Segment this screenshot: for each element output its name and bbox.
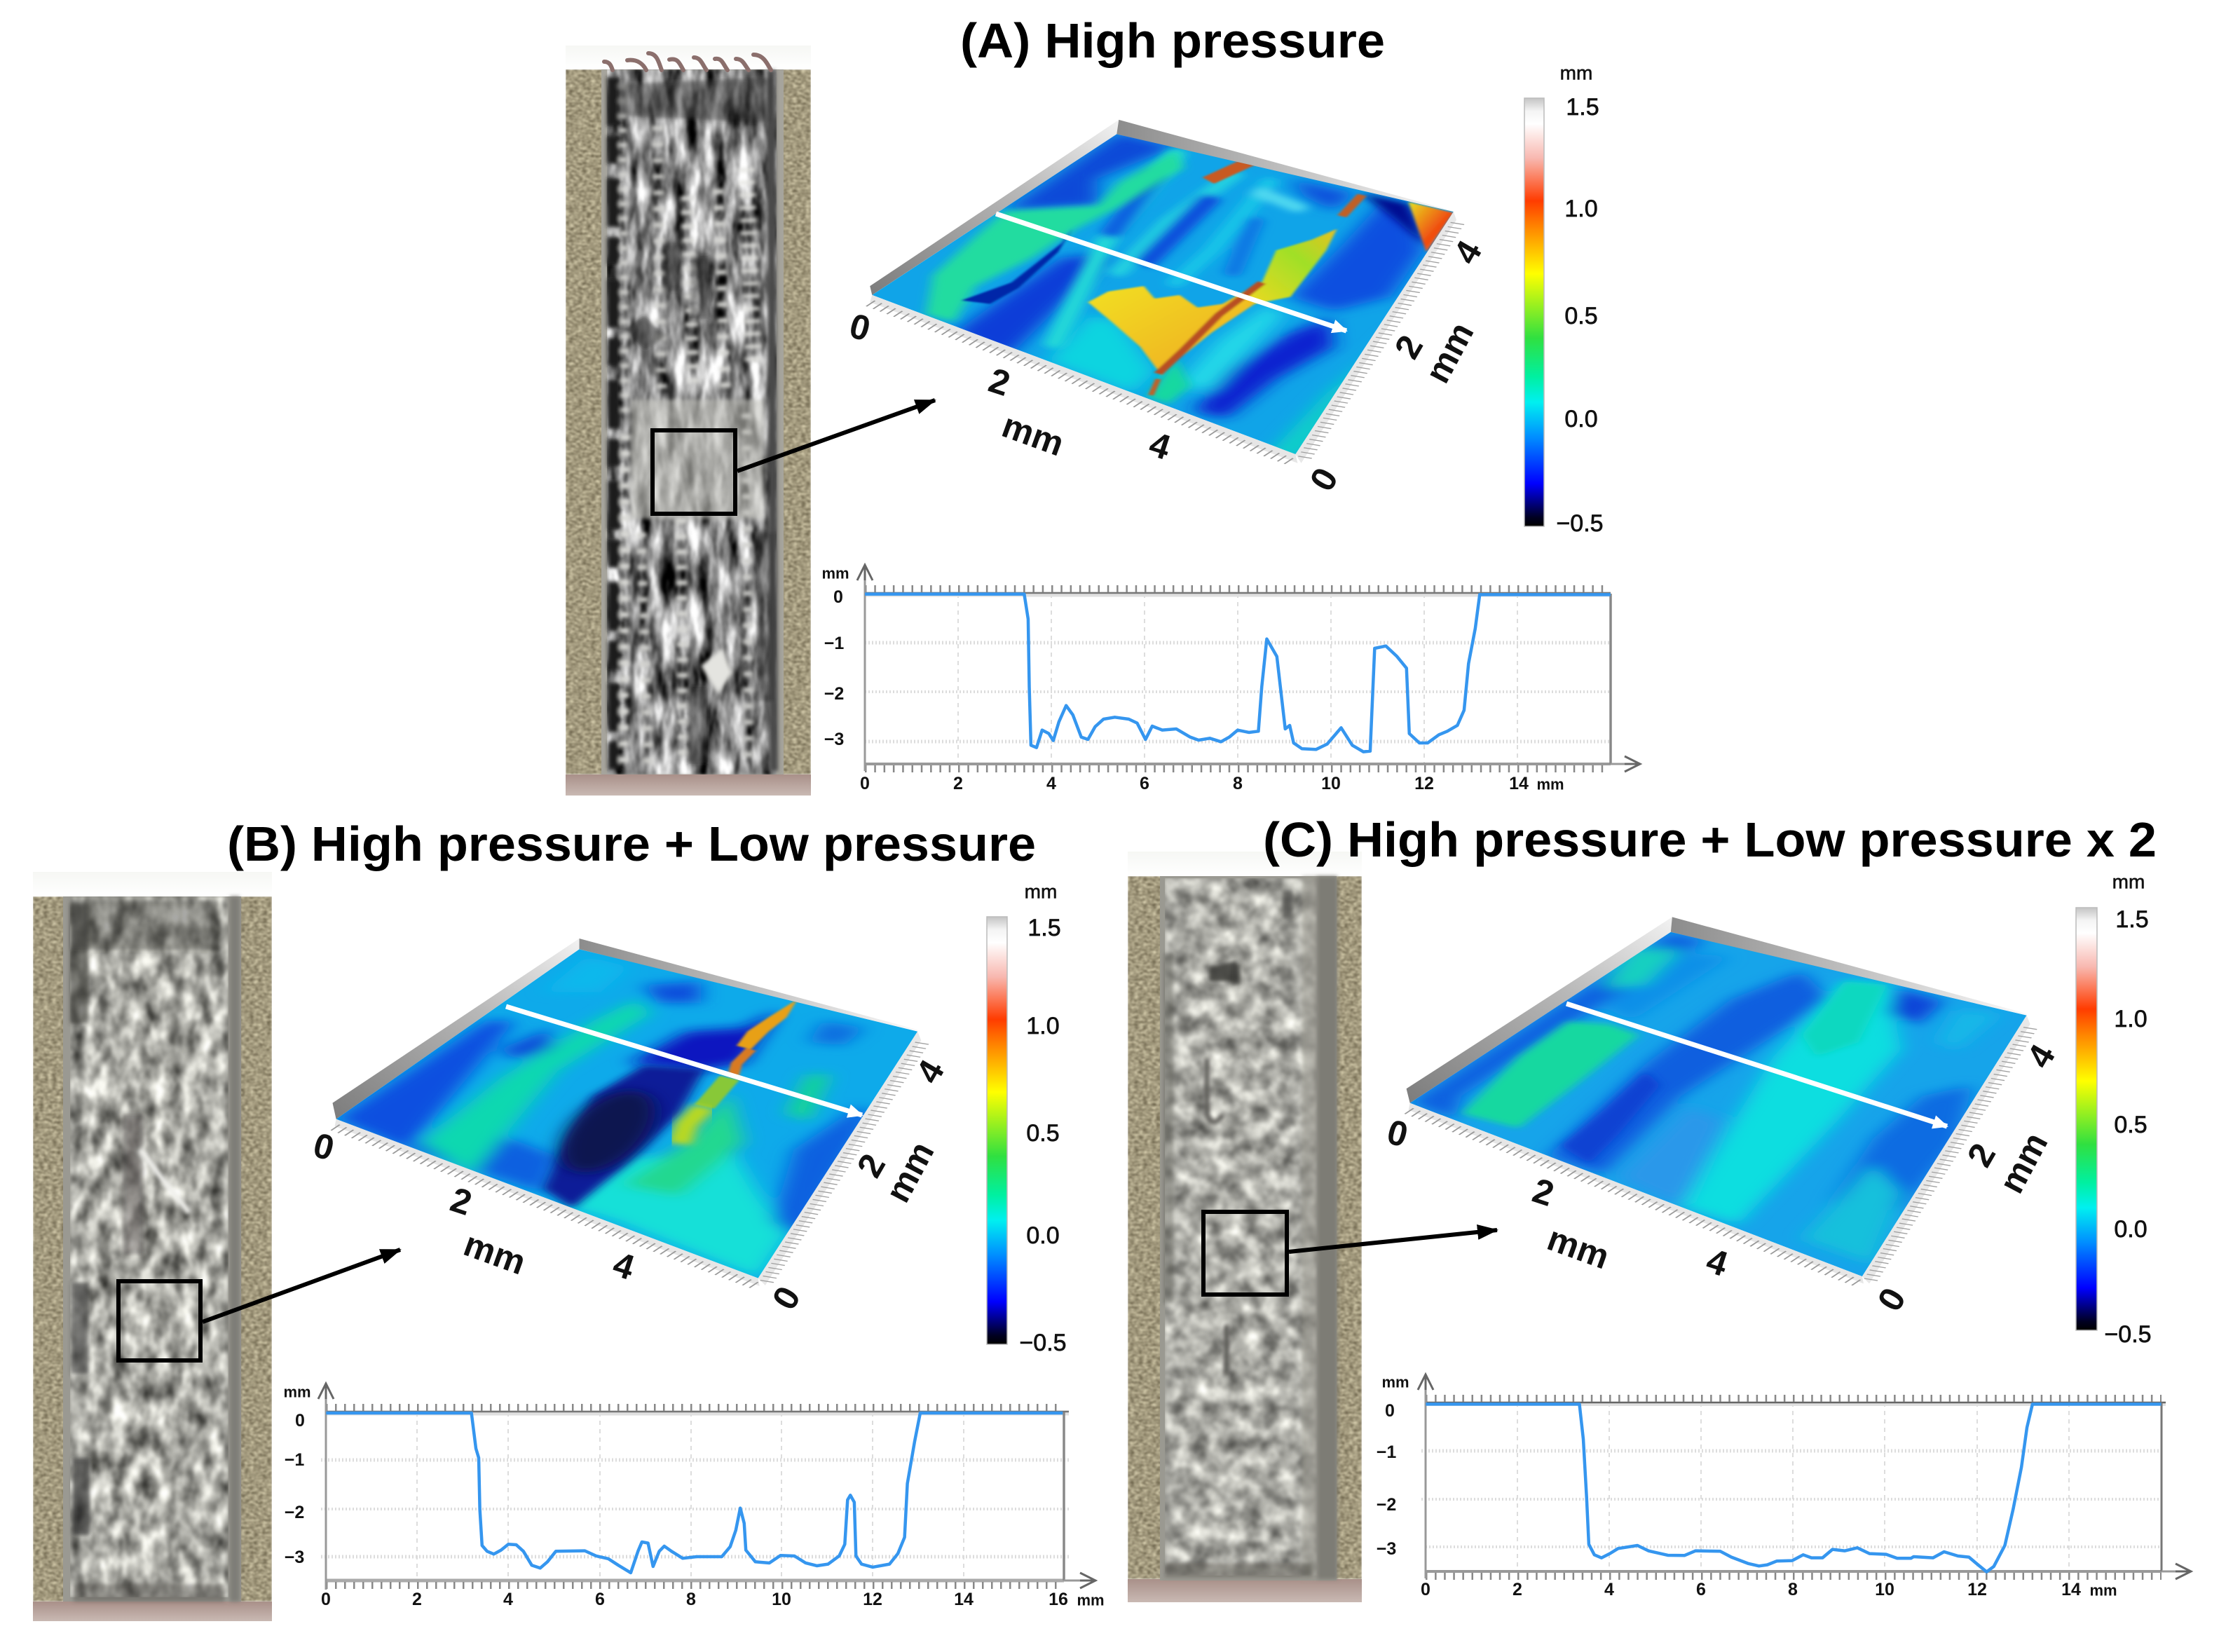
- profile chart A: 6: [1140, 774, 1149, 793]
- profile chart A: 0: [833, 587, 843, 607]
- profile chart A: 10: [1321, 774, 1341, 793]
- profile chart B: −3: [285, 1548, 304, 1567]
- profile chart B: 8: [686, 1590, 696, 1609]
- profile chart A: 14: [1509, 774, 1529, 793]
- profile chart C: −3: [1377, 1539, 1396, 1559]
- profile chart A: −1: [824, 634, 844, 653]
- profile chart B: mm: [1077, 1591, 1105, 1609]
- panel B: high pressure + low pressure: [33, 817, 1105, 1621]
- colour bar B: 0.5: [1026, 1120, 1060, 1147]
- axis labels A: 4: [1145, 424, 1175, 467]
- colour bar C: [2076, 871, 2152, 1348]
- axis labels A: mm: [1417, 316, 1482, 389]
- profile chart B: 16: [1049, 1590, 1068, 1609]
- axis labels C: 2: [1528, 1170, 1559, 1214]
- axis labels C: 4: [1702, 1241, 1733, 1284]
- profile chart C: 0: [1385, 1401, 1395, 1421]
- axis labels B: 0: [765, 1280, 808, 1316]
- colour bar A: [1524, 62, 1604, 537]
- colour bar B: −0.5: [1019, 1330, 1067, 1356]
- axis labels C: 0: [1870, 1281, 1913, 1318]
- profile chart C: 6: [1696, 1580, 1706, 1599]
- axis labels C: [1383, 1038, 2063, 1318]
- photo A: sample with braided surface: [566, 46, 811, 796]
- white profile arrow C: [1566, 1004, 1947, 1126]
- profile chart C: −2: [1377, 1495, 1396, 1515]
- colour bar C: −0.5: [2104, 1321, 2152, 1348]
- colour bar A: 0.0: [1564, 406, 1598, 432]
- profile chart B: 14: [954, 1590, 974, 1609]
- profile chart B: [283, 1384, 1105, 1609]
- colour bar B: [987, 880, 1067, 1356]
- colour bar C: 1.5: [2115, 906, 2149, 933]
- colour bar A: mm: [1560, 62, 1592, 84]
- axis labels B: 2: [849, 1147, 893, 1184]
- axis labels B: mm: [459, 1224, 531, 1283]
- colour bar C: 0.5: [2114, 1112, 2147, 1138]
- white profile arrow A: [996, 214, 1346, 331]
- colour bar C: 1.0: [2114, 1006, 2147, 1032]
- axis labels A: 0: [845, 306, 875, 349]
- profile chart B: 2: [412, 1590, 422, 1609]
- axis labels C: 4: [2019, 1038, 2063, 1074]
- colour bar B: mm: [1025, 880, 1057, 903]
- profile chart C: mm: [1381, 1374, 1409, 1391]
- profile chart A: 8: [1233, 774, 1243, 793]
- axis labels A: 2: [1387, 329, 1430, 365]
- profile chart C: −1: [1377, 1442, 1396, 1462]
- profile chart A: mm: [821, 565, 849, 582]
- arrow C: inset to 3D map: [1289, 1230, 1497, 1252]
- 3D surface map C: [1407, 917, 2032, 1284]
- axis labels C: mm: [1991, 1126, 2056, 1199]
- profile chart C: 8: [1788, 1580, 1798, 1599]
- arrow A: inset to 3D map: [737, 400, 935, 471]
- profile chart C: [1377, 1374, 2191, 1599]
- axis labels A: 0: [1302, 461, 1346, 498]
- profile chart B: −1: [285, 1450, 304, 1470]
- axis labels B: 0: [309, 1125, 339, 1168]
- axis labels B: 4: [608, 1244, 639, 1288]
- axis labels C: 2: [1960, 1137, 2003, 1173]
- inset box on photo A: [653, 430, 735, 514]
- inset box on photo B: [118, 1281, 200, 1360]
- title C: (C) High pressure + Low pressure x 2: [1263, 812, 2157, 867]
- profile chart C: 2: [1512, 1580, 1522, 1599]
- axis labels A: 2: [984, 360, 1015, 404]
- axis labels C: mm: [1543, 1218, 1614, 1277]
- profile chart B: −2: [285, 1503, 304, 1522]
- colour bar A: 1.5: [1566, 94, 1599, 121]
- profile chart B: 4: [503, 1590, 513, 1609]
- colour bar A: 1.0: [1564, 196, 1598, 222]
- profile chart C: 0: [1421, 1580, 1430, 1599]
- profile chart B: 0: [321, 1590, 331, 1609]
- profile chart C: 10: [1875, 1580, 1894, 1599]
- axis labels A: [845, 234, 1489, 498]
- axis labels C: 0: [1383, 1112, 1412, 1155]
- profile chart B: 10: [772, 1590, 791, 1609]
- profile chart C: 4: [1604, 1580, 1614, 1599]
- 3D surface map B: [332, 938, 922, 1286]
- arrow B: inset to 3D map: [203, 1250, 400, 1322]
- profile chart A: 0: [860, 774, 870, 793]
- colour bar A: 0.5: [1564, 303, 1598, 329]
- axis labels A: 4: [1446, 234, 1489, 271]
- profile chart B: 0: [295, 1411, 305, 1431]
- title A: (A) High pressure: [960, 13, 1385, 68]
- profile chart A: −3: [824, 730, 844, 749]
- profile chart C: mm: [2089, 1581, 2117, 1599]
- profile chart A: 2: [953, 774, 963, 793]
- axis labels B: 4: [908, 1053, 952, 1090]
- profile chart A: mm: [1536, 775, 1564, 793]
- colour bar C: mm: [2112, 871, 2145, 893]
- profile chart A: [821, 565, 1640, 793]
- axis labels A: mm: [997, 405, 1069, 464]
- profile chart A: −2: [824, 684, 844, 704]
- white profile arrow B: [506, 1006, 862, 1115]
- axis labels B: 2: [446, 1180, 477, 1223]
- colour bar B: 0.0: [1026, 1222, 1060, 1249]
- title B: (B) High pressure + Low pressure: [227, 817, 1036, 871]
- profile chart C: 14: [2061, 1580, 2081, 1599]
- profile chart B: mm: [283, 1384, 311, 1400]
- inset box on photo C: [1203, 1212, 1287, 1295]
- profile chart B: 12: [863, 1590, 882, 1609]
- axis labels B: mm: [878, 1135, 942, 1208]
- colour bar B: 1.5: [1027, 915, 1061, 941]
- 3D surface map A: [870, 120, 1459, 463]
- colour bar B: 1.0: [1026, 1013, 1060, 1039]
- profile chart B: 6: [595, 1590, 605, 1609]
- profile chart A: 12: [1414, 774, 1434, 793]
- panel A: high pressure: [566, 13, 1640, 796]
- colour bar A: −0.5: [1556, 510, 1604, 537]
- profile chart A: 4: [1046, 774, 1056, 793]
- photo C: sample surface: [1128, 852, 1362, 1602]
- profile chart C: 12: [1967, 1580, 1987, 1599]
- colour bar C: 0.0: [2114, 1216, 2147, 1243]
- axis labels B: [309, 1053, 952, 1316]
- panel C: high pressure + low pressure x 2: [1128, 812, 2191, 1602]
- photo B: sample surface: [33, 872, 272, 1621]
